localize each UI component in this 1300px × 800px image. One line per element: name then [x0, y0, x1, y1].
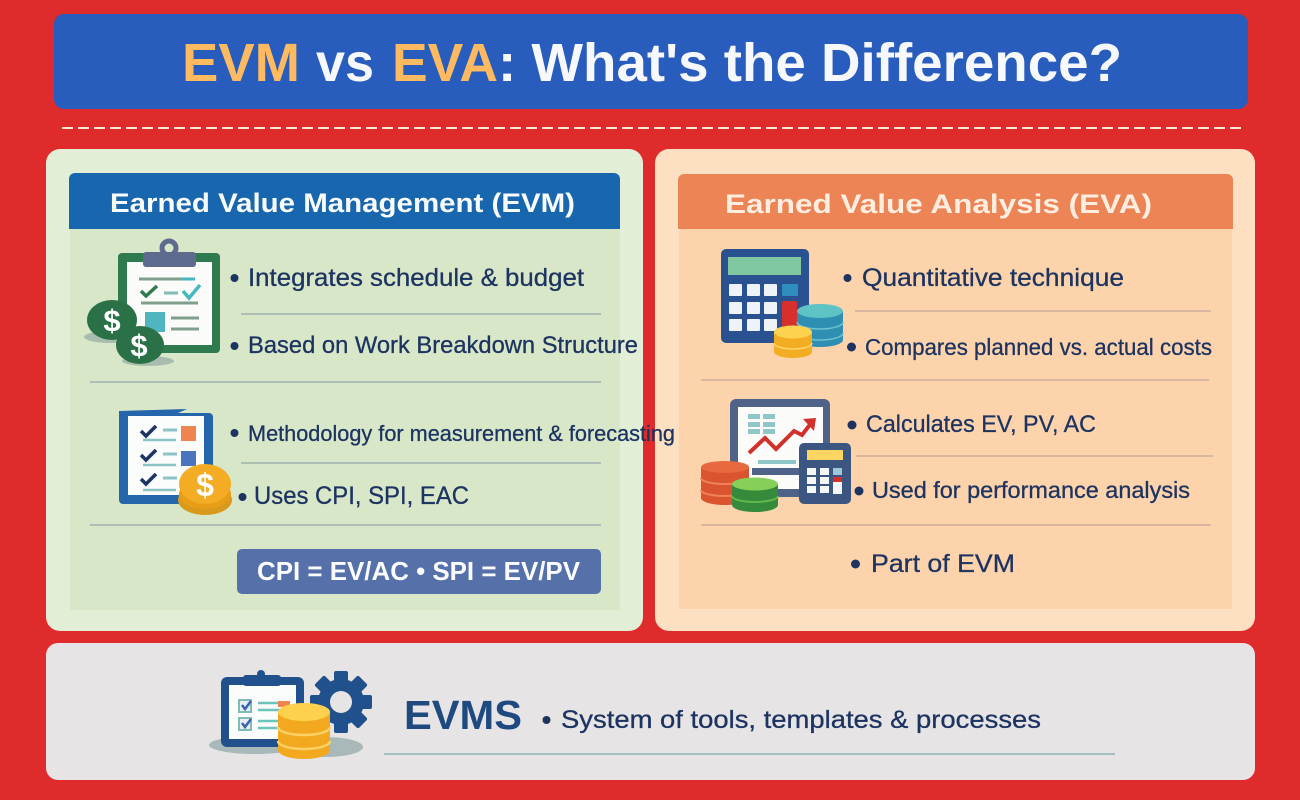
bullet: quantitative technique: Quantitative technique — [862, 264, 1124, 292]
title banner: EVM — [182, 33, 300, 93]
EVA heading — [678, 174, 1233, 229]
icon: checklist book with coins: $ — [196, 467, 214, 503]
icon: calculator with coins — [721, 249, 843, 358]
bullet: performance analysis: Used for performance analysis — [872, 477, 1190, 503]
bullet marker: methodology — [230, 429, 238, 437]
EVM heading — [69, 173, 620, 229]
title banner — [54, 14, 1248, 109]
panel: EVM — [46, 149, 643, 631]
bullet: uses CPI SPI EAC: Uses CPI, SPI, EAC — [254, 482, 469, 510]
bullet: compares costs: Compares planned vs. actual costs — [865, 334, 1212, 360]
icon: clipboard with money bags: $ — [130, 328, 148, 363]
text: methodology, overflowing onto the EVA panel: Methodology for measurement & forecasting — [248, 421, 675, 446]
title banner: EVA — [392, 33, 498, 93]
icon: clipboard, gear and coins — [209, 670, 372, 759]
bullet: part of EVM: Part of EVM — [871, 550, 1015, 578]
EVMS label: EVMS — [404, 692, 522, 738]
icon: checklist book with coins — [119, 409, 232, 515]
icon: clipboard with money bags — [84, 241, 220, 366]
formula box: CPI = EV/AC • SPI = EV/PV — [257, 556, 581, 586]
panel: EVMS — [46, 643, 1255, 780]
bullet: integrates schedule and budget: Integrates schedule & budget — [248, 264, 584, 292]
EVM heading: Earned Value Management (EVM) — [110, 188, 575, 218]
bullet: based on WBS: Based on Work Breakdown Structure — [248, 332, 638, 359]
bullet: calculates EV PV AC: Calculates EV, PV, AC — [866, 411, 1096, 438]
icon: clipboard with money bags: $ — [103, 303, 121, 338]
formula box — [237, 549, 601, 594]
bullet: system of tools: System of tools, templates & processes — [561, 706, 1041, 734]
panel: EVA — [655, 149, 1255, 631]
EVA heading: Earned Value Analysis (EVA) — [725, 189, 1152, 219]
title banner: : What's the Difference? — [498, 33, 1122, 93]
title banner: vs — [316, 33, 374, 93]
icon: chart with calculator and coins — [701, 399, 851, 512]
